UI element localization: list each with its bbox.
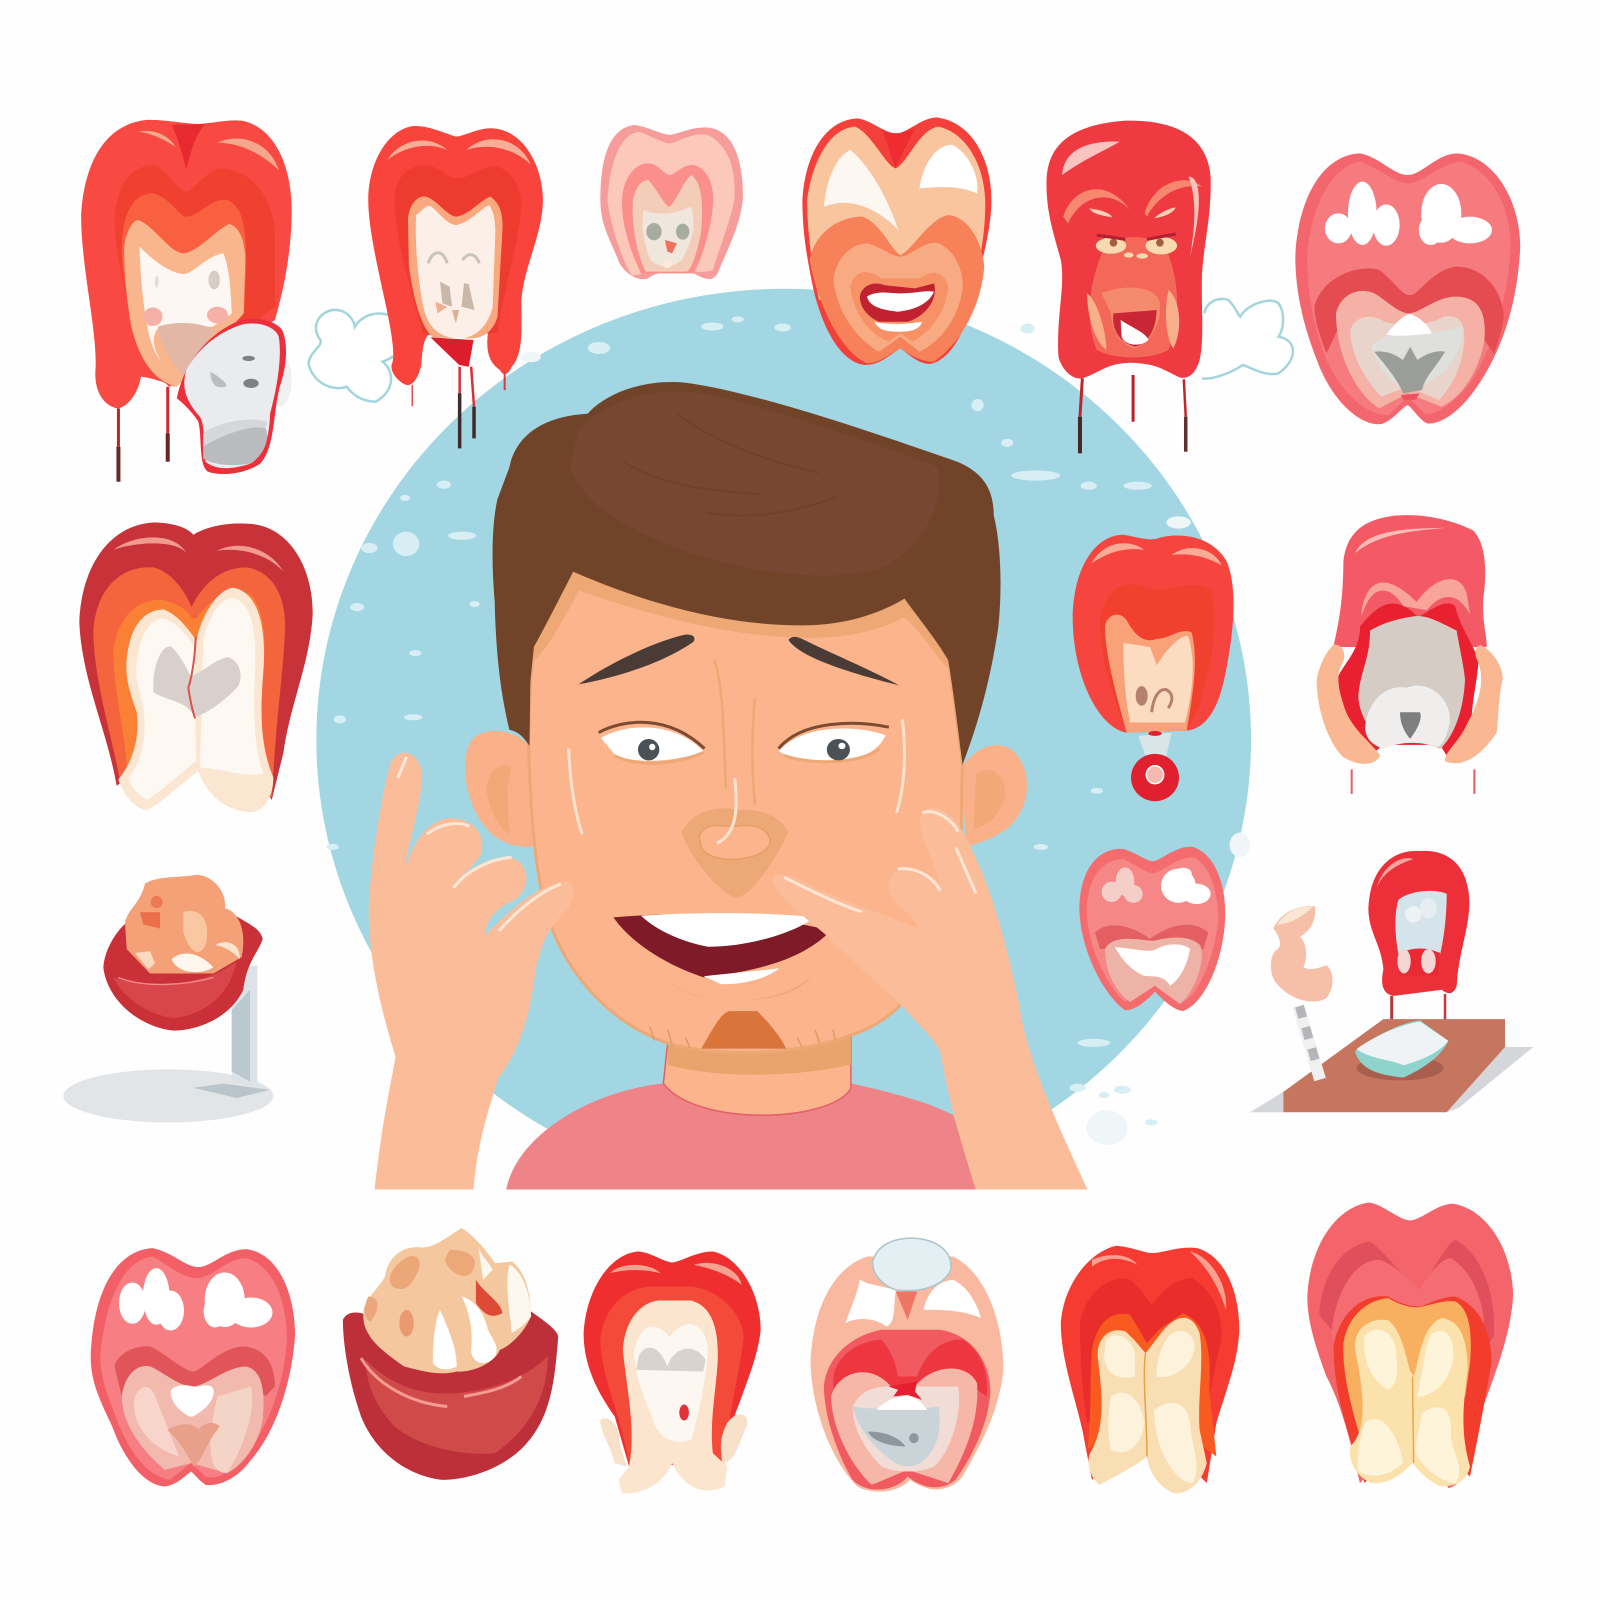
tooth 18 large pink [1307,1202,1513,1488]
top row teeth, right side [802,117,1520,453]
tooth 15 with red spot [584,1251,761,1493]
left hand [369,753,574,1189]
tooth 14 bowl with decay [343,1228,558,1480]
tooth 7 cracked [79,522,313,812]
tooth 9 with red ring [1073,535,1234,801]
tooth 5 with angry face [1046,121,1211,453]
bottom row teeth, left side [91,1228,761,1493]
tooth 16 with cap [811,1238,1003,1492]
tooth 6 open mouth shape [1295,153,1520,424]
middle right column [1073,515,1533,1112]
tooth 4 with mouth [802,117,991,365]
goatee [650,1011,835,1049]
tooth 1 with gauze swab [81,120,292,482]
nose [681,778,788,898]
cloud puff left [308,310,407,402]
tooth 11 pink [1079,847,1225,1011]
dental tool [1271,906,1333,1080]
gauze swab [177,319,292,474]
bottom row teeth, right side [811,1202,1513,1493]
tooth on stand [63,875,273,1122]
cloud puff right [1202,299,1293,379]
tooth 13 pink with heart [91,1248,295,1486]
neck [663,1033,851,1115]
right eye [779,723,889,762]
middle left column [63,522,313,1122]
tooth 12 small with window [1368,851,1469,1024]
tooth 10 held by hands [1317,515,1503,794]
tooth 2 bleeding [368,126,543,448]
right hand [773,808,1088,1189]
blue background circle [316,289,1251,1191]
face [529,572,962,1052]
person with toothache [369,382,1088,1189]
hair [493,382,1001,765]
shirt [506,1083,976,1189]
top row teeth, left side [81,120,743,482]
tooth 3 pale [600,125,743,279]
eyebrows [579,634,899,685]
left eye [599,722,704,763]
wooden board with gauze [1250,1019,1533,1112]
tooth 17 red and cream [1061,1246,1239,1493]
mouth [613,913,831,984]
ears [465,731,1027,847]
wrinkles and sweat highlights [569,660,904,834]
